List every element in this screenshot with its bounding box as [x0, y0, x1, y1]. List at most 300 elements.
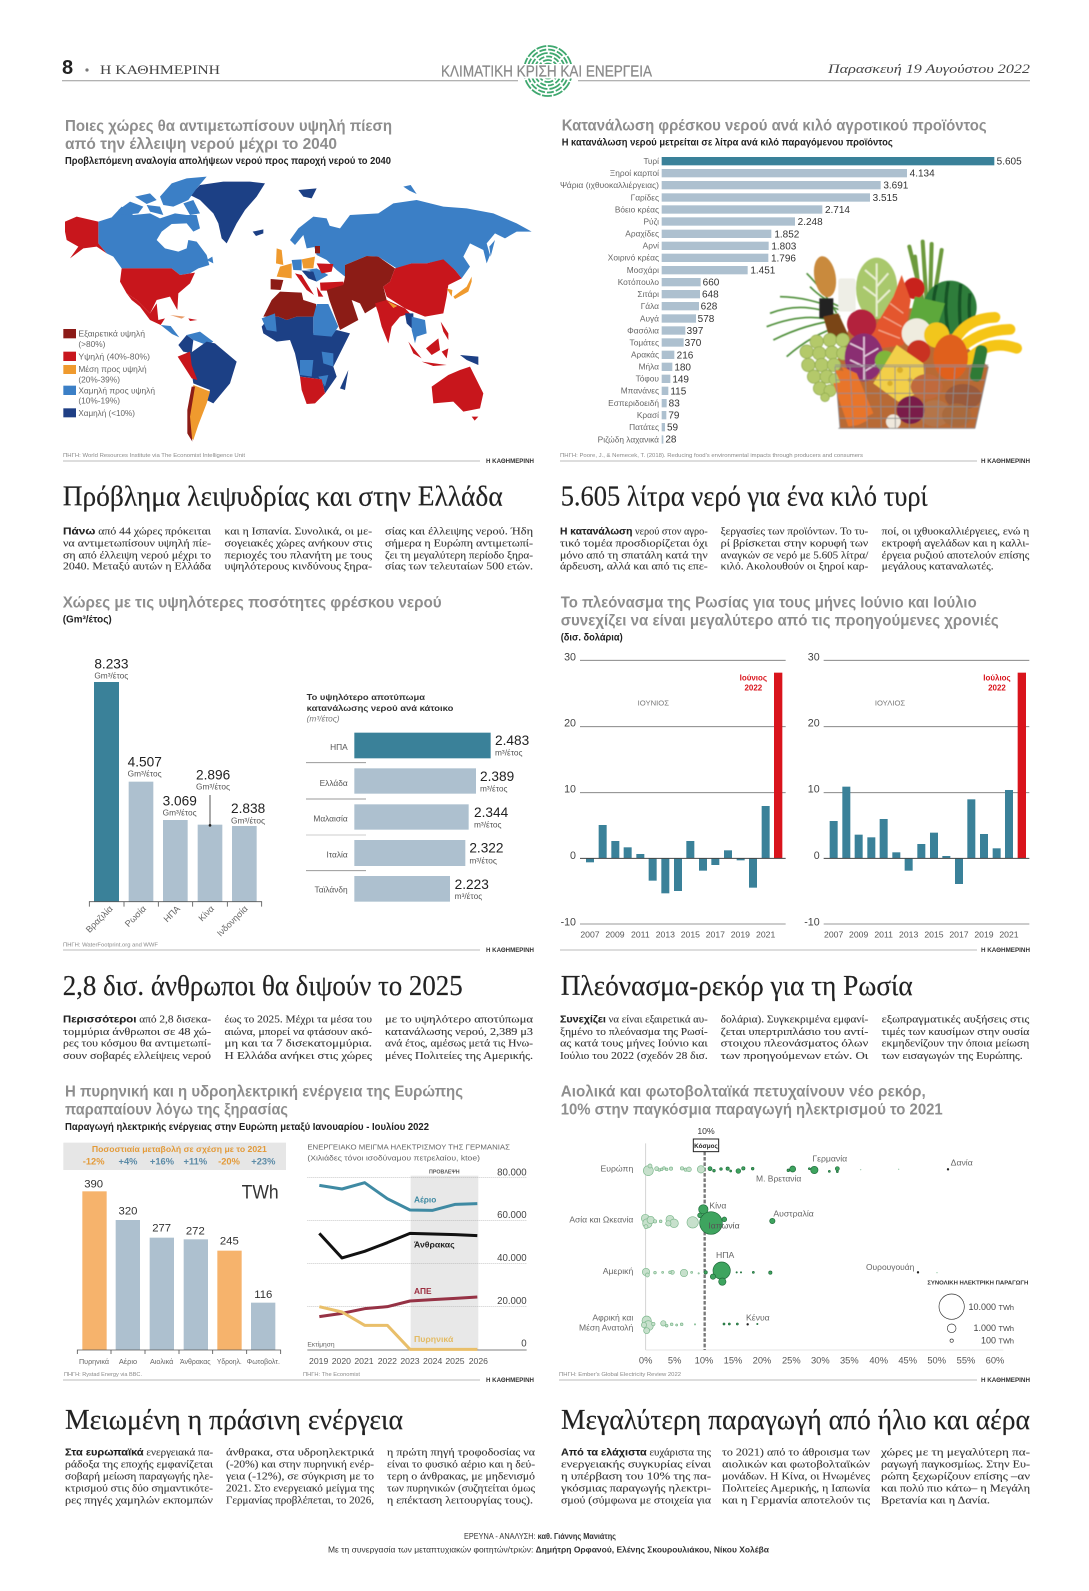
line chart: German electricity mix: Πυρηνικά: [414, 1334, 454, 1344]
heading: 2,8 δισ. άνθρωποι θα διψούν το 2025: [63, 971, 463, 1002]
horizontal bar chart: Τόφου: [636, 374, 659, 384]
bar chart: fresh water by country: Gm³/έτος: [128, 769, 162, 779]
body text: σίας και έλλειψης νερού. Ήδη: [385, 526, 533, 537]
body text: γκόσμιας παραγωγής ηλεκτρι-: [560, 1484, 712, 1495]
panel: wind and solar share bubble chart: [559, 1084, 1031, 1384]
body text: ξημένο το πλεόνασμα της Ρωσί-: [560, 1027, 708, 1038]
horizontal bar chart: Εσπεριδοειδή: [608, 398, 659, 408]
body text: [63, 525, 534, 573]
bubble chart: Αυστραλία: [773, 1209, 814, 1219]
map legend: Χαμηλή προς υψηλή: [78, 385, 155, 395]
body text: τομμύρια άνθρωποι σε 48 χώ-: [63, 1027, 212, 1038]
line chart: German electricity mix: 2021: [354, 1356, 374, 1366]
body text: δολάρια). Συγκεκριμένα εμφανί-: [721, 1015, 869, 1026]
body text: σουν σοβαρές ελλείψεις νερού: [63, 1051, 211, 1062]
body text: έργεια ρυζιού αποτελούν επίσης: [882, 550, 1030, 561]
body text: Περισσότεροι από 2,8 δισεκα-: [63, 1014, 212, 1026]
bar chart: July surplus: 20: [808, 718, 820, 730]
body text: Συνεχίζει να είναι εξαιρετικά αυ-: [560, 1014, 708, 1026]
body text: εκτροφή αγελάδων και η καλλι-: [882, 538, 1030, 549]
bubble chart: ΗΠΑ: [716, 1250, 735, 1260]
body text: τιμές των καυσίμων στην ουσία: [882, 1027, 1030, 1038]
body text: γεια (-12%), σε σύγκριση με το: [225, 1472, 374, 1483]
bar chart: electricity generation in TWh: 116: [254, 1289, 272, 1301]
body text: έως το 2025. Μέχρι τα μέσα του: [224, 1015, 372, 1026]
map title: Ποιες χώρες θα αντιμετωπίσουν υψηλή πίεση: [65, 118, 392, 135]
body text: των προηγούμενων ετών. Οι: [721, 1051, 869, 1062]
percentage change strip: +23%: [251, 1157, 276, 1167]
bar chart: June surplus: 30: [564, 652, 576, 664]
horizontal bar chart: Αυγά: [640, 313, 659, 323]
horizontal bar chart: 370: [685, 338, 702, 349]
bubble chart: 5%: [668, 1355, 681, 1365]
bar chart: July surplus: -10: [804, 916, 820, 928]
bubble chart: 40%: [869, 1355, 888, 1365]
bar chart: water footprint per capita: κατανάλωσης νερού ανά κάτοικο: [307, 703, 453, 713]
bubble chart: Μ. Βρετανία: [756, 1174, 801, 1184]
body text: [63, 1014, 534, 1062]
bar chart: electricity generation in TWh: 272: [186, 1226, 205, 1238]
newspaper name: Η ΚΑΘΗΜΕΡΙΝΗ: [100, 62, 220, 77]
article: 5,605 litres per kilo of cheese: [560, 482, 1030, 573]
bar chart: water footprint per capita: Ιταλία: [327, 849, 348, 859]
body text: μονάδων. Η Κίνα, οι Ηνωμένες: [722, 1472, 871, 1483]
bar chart: July surplus: ΙΟΥΛΙΟΣ: [875, 698, 905, 707]
horizontal bar chart: 180: [674, 362, 691, 373]
bubble chart: 60%: [986, 1355, 1004, 1365]
map source: [63, 453, 535, 465]
body text: (-20%) και στην πυρηνική ενέρ-: [226, 1460, 375, 1471]
bubble chart: Ιαπωνία: [708, 1221, 740, 1231]
chart title: 10% στην παγκόσμια παραγωγή ηλεκτρισμού το 2021: [561, 1101, 943, 1118]
body text: είναι το φυσικό αέριο και η δεύ-: [387, 1460, 536, 1471]
bar chart: July surplus: 2007: [824, 930, 843, 940]
bubble chart: Αφρική και: [592, 1313, 633, 1323]
body text: μεγάλους καταναλωτές.: [882, 562, 994, 573]
horizontal bar chart: 2.714: [825, 205, 850, 216]
world map: [65, 177, 532, 442]
horizontal bar chart: 4.134: [910, 169, 935, 180]
bar chart: water footprint per capita: m³/έτος: [469, 855, 497, 865]
body text: των πυρηνικών (συζητείται όμως: [387, 1484, 536, 1495]
bubble chart: 50%: [927, 1355, 946, 1365]
body text: μη και τα 7 δισεκατομμύρια.: [224, 1039, 372, 1050]
line chart: German electricity mix: (Χιλιάδες τόνοι ισοδύναμου πετρελαίου, ktoe): [307, 1154, 480, 1163]
section title: ΚΛΙΜΑΤΙΚΗ ΚΡΙΣΗ ΚΑΙ ΕΝΕΡΓΕΙΑ: [441, 64, 652, 81]
map legend: Χαμηλή (<10%): [78, 408, 135, 418]
horizontal bar chart: 59: [667, 423, 679, 434]
body text: σογειακές χώρες ανήκουν στις: [224, 538, 373, 549]
bar chart: fresh water by country: Κίνα: [197, 904, 216, 923]
body text: η πρώτη πηγή τροφοδοσίας να: [387, 1448, 536, 1459]
bubble chart: Ασία και Ωκεανία: [569, 1215, 633, 1225]
bar chart: water footprint per capita: 2.223: [455, 877, 489, 892]
bubble chart: 15%: [724, 1355, 742, 1365]
horizontal bar chart: Ρύζι: [644, 216, 659, 226]
map legend: (20%-39%): [78, 374, 120, 384]
percentage change strip: +16%: [150, 1157, 175, 1167]
body text: ράδοξα της εποχής εμφανίζεται: [65, 1460, 213, 1471]
body text: κτρισμού στις δύο σημαντικότε-: [65, 1484, 214, 1495]
line chart: German electricity mix: 60.000: [497, 1210, 527, 1221]
map legend: (>80%): [78, 339, 106, 349]
bar chart: July surplus: 2015: [924, 930, 944, 940]
horizontal bar chart: 3.691: [883, 181, 909, 192]
bar chart: fresh water by country: Gm³/έτος: [196, 782, 230, 792]
body text: [560, 525, 1030, 573]
body text: χώρες με τη μεγαλύτερη πα-: [880, 1448, 1031, 1459]
chart rule and credit: Η ΚΑΘΗΜΕΡΙΝΗ: [981, 947, 1031, 954]
body text: 2040. Μεταξύ αυτών η Ελλάδα: [63, 562, 212, 573]
bubbles: light group below world share: [641, 1164, 705, 1334]
line chart: German electricity mix: ΕΝΕΡΓΕΙΑΚΟ ΜΕΙΓΜΑ ΗΛΕΚΤΡΙΣΜΟΥ ΤΗΣ ΓΕΡΜΑΝΙΑΣ: [307, 1142, 510, 1151]
body text: σοβαρή μείωση παραγωγής ηλε-: [65, 1472, 214, 1483]
chart source: Η ΚΑΘΗΜΕΡΙΝΗ: [981, 1377, 1031, 1384]
horizontal bar chart: Φασόλια: [627, 325, 659, 335]
bubble chart: Γερμανία: [812, 1154, 847, 1164]
chart sources: ΠΗΓΗ: The Economist: [303, 1372, 360, 1378]
body text: Γερμανίας προβλέπεται, το 2026,: [226, 1495, 374, 1506]
map title: [65, 118, 392, 153]
body text: [65, 1447, 536, 1506]
body text: Ιούλιο του 2022 (σχεδόν 28 δισ.: [560, 1051, 708, 1062]
body text: αναγκών σε νερό με 5.605 λίτρα/: [721, 550, 868, 561]
body text: ξεργασίες των προϊόντων. Το τυ-: [721, 526, 869, 537]
body text: ποί, οι ιχθυοκαλλιέργειες, ενώ η: [882, 526, 1029, 537]
heading: Πρόβλημα λειψυδρίας και στην Ελλάδα: [63, 482, 503, 513]
bar chart: water footprint per capita: [306, 692, 529, 902]
bar chart: electricity generation in TWh: Αέριο: [119, 1357, 137, 1366]
horizontal bar chart: Αραχίδες: [625, 229, 659, 239]
body text: ας κατά τους μήνες Ιούνιο και: [560, 1039, 708, 1050]
horizontal bar chart: Βόειο κρέας: [615, 204, 659, 214]
horizontal bar chart: 216: [677, 350, 694, 361]
body text: με το υψηλότερο αποτύπωμα: [385, 1015, 534, 1026]
bar chart: electricity generation in TWh: Αιολικά: [150, 1357, 174, 1366]
chart source: [63, 943, 535, 954]
article: reduced green energy: [65, 1405, 536, 1506]
chart subtitle: Παραγωγή ηλεκτρικής ενέργειας στην Ευρώπη μεταξύ Ιανουαρίου - Ιουλίου 2022: [65, 1122, 429, 1133]
panel: European nuclear and hydro energy: [63, 1084, 535, 1384]
body text: και πολύ πιο κάτω– η Μεγάλη: [881, 1484, 1030, 1495]
map legend: Μέση προς υψηλή: [78, 364, 147, 374]
bubble chart: Μέση Ανατολή: [579, 1323, 634, 1333]
bubble size legend: [927, 1281, 1028, 1345]
body text: περιοχές του πλανήτη με τους: [224, 550, 373, 561]
article: 2.8 billion people: [63, 971, 534, 1062]
bar chart: July surplus: [804, 652, 1029, 940]
chart title: Η πυρηνική και η υδροηλεκτρική ενέργεια της Ευρώπης: [65, 1084, 463, 1101]
chart title: Χώρες με τις υψηλότερες ποσότητες φρέσκου νερού: [63, 594, 442, 611]
line chart: German electricity mix: 2024: [423, 1356, 442, 1366]
bar chart: fresh water by country: Ρωσία: [123, 904, 148, 929]
horizontal bar chart: 79: [668, 411, 680, 422]
body text: στοιχου πλεονάσματος όλων: [721, 1039, 869, 1050]
horizontal bar chart: Αρνί: [643, 241, 659, 251]
bar chart: June surplus: ΙΟΥΝΙΟΣ: [638, 698, 669, 707]
bar chart: water footprint per capita: m³/έτος: [474, 820, 502, 830]
bar chart: fresh water by country: Gm³/έτος: [163, 808, 197, 818]
bar chart: fresh water by country: 8.233: [94, 656, 129, 671]
line chart: German electricity mix: 2025: [445, 1356, 465, 1366]
bubble chart: 20%: [753, 1355, 771, 1365]
bubble chart: Δανία: [951, 1157, 973, 1167]
body text: η επέκταση λειτουργίας τους).: [387, 1495, 533, 1506]
horizontal bar chart: 1.852: [774, 229, 800, 240]
bubble size legend: 100 TWh: [981, 1335, 1014, 1345]
horizontal bar chart: Μήλα: [639, 362, 659, 372]
chart title: [561, 1084, 943, 1118]
chart title: Το πλεόνασμα της Ρωσίας για τους μήνες Ιούνιο και Ιούλιο: [561, 594, 977, 611]
body text: άνθρακα, στα υδροηλεκτρικά: [226, 1448, 375, 1459]
bar chart: fresh water by country: 4.507: [128, 754, 162, 769]
bar chart: July surplus: 2013: [899, 930, 918, 940]
bubble chart: 25%: [782, 1355, 801, 1365]
map source: ΠΗΓΗ: World Resources Institute via The Economist Intelligence Unit: [63, 453, 246, 459]
bubble chart: [569, 1126, 1028, 1365]
body text: μόνο από τη σπατάλη κατά την: [560, 550, 708, 561]
percentage change strip: -20%: [218, 1157, 241, 1167]
bar chart: water footprint per capita: 2.483: [495, 733, 529, 748]
bar chart: July surplus: 2022: [988, 684, 1006, 693]
bar chart: July surplus: 2019: [974, 930, 994, 940]
body text: άρδευση, αλλά και από τις επε-: [560, 562, 708, 573]
horizontal bar chart: 149: [672, 374, 689, 385]
bar chart: electricity generation in TWh: Υδροηλ.: [217, 1357, 242, 1366]
line chart: German electricity mix: [307, 1142, 527, 1366]
bar chart: fresh water by country: [84, 656, 265, 938]
map subtitle: Προβλεπόμενη αναλογία απολήψεων νερού προς παροχή νερού το 2040: [65, 156, 391, 167]
chart title: [561, 594, 999, 630]
horizontal bar chart: 660: [703, 278, 720, 289]
bar chart: June surplus: 2009: [605, 930, 625, 940]
chart source: Η ΚΑΘΗΜΕΡΙΝΗ: [981, 458, 1031, 465]
bubble chart: Αμερική: [603, 1266, 634, 1276]
body text: το 2021) από το άθροισμα των: [722, 1448, 870, 1459]
line chart: German electricity mix: Εκτίμηση: [307, 1341, 335, 1349]
bar chart: water footprint per capita: 2.344: [474, 805, 509, 820]
horizontal bar chart: 628: [701, 302, 718, 313]
bar chart: electricity generation in TWh: Άνθρακας: [180, 1357, 211, 1366]
body text: των εισαγωγών της Ευρώπης.: [882, 1051, 1023, 1062]
horizontal bar chart: Τομάτες: [630, 337, 659, 347]
body text: και η Γερμανία αποτελούν τις: [722, 1495, 871, 1506]
heading: 5.605 λίτρα νερό για ένα κιλό τυρί: [561, 482, 928, 513]
horizontal bar chart: 28: [665, 435, 677, 446]
bubble chart: Κένυα: [746, 1313, 770, 1323]
bar chart: July surplus: 2021: [999, 930, 1019, 940]
bar chart: July surplus: 0: [814, 850, 820, 862]
horizontal bar chart: Γάλα: [641, 301, 659, 311]
body text: η υπέρβαση του 10% της πα-: [561, 1472, 712, 1483]
horizontal bar chart: Πατάτες: [629, 422, 659, 432]
body text: τερη ο άνθρακας, με μηδενισμό: [387, 1472, 535, 1483]
bar chart: June surplus: 2015: [681, 930, 700, 940]
bar chart: water footprint per capita: m³/έτος: [455, 891, 482, 901]
bar chart: June surplus: 0: [570, 850, 576, 862]
chart unit: (δισ. δολάρια): [561, 633, 623, 644]
horizontal bar chart: 115: [670, 386, 687, 397]
horizontal bar chart: 83: [669, 399, 680, 410]
body text: Πολιτείες Αμερικής, η Ιαπωνία: [722, 1484, 871, 1495]
line chart: German electricity mix: ΠΡΟΒΛΕΨΗ: [429, 1169, 460, 1175]
bar chart: water footprint per capita: Ελλάδα: [320, 778, 348, 788]
horizontal bar chart: Μπανάνες: [621, 386, 659, 396]
bar chart: June surplus: 2021: [756, 930, 775, 940]
bar chart: June surplus: -10: [561, 916, 576, 928]
bar chart: June surplus: Ιούνιος: [740, 674, 767, 683]
body text: Στα ευρωπαϊκά ενεργειακά πα-: [65, 1447, 214, 1459]
bar chart: June surplus: 2007: [580, 930, 600, 940]
bar chart: June surplus: 2017: [706, 930, 725, 940]
bar chart: fresh water by country: Ινδονησία: [215, 904, 250, 938]
bubble chart: Ευρώπη: [600, 1164, 634, 1174]
bar chart: June surplus: 10: [564, 784, 576, 796]
body text: τικό τομέα προσδιορίζεται όχι: [560, 538, 708, 549]
body text: ζει τη μεγαλύτερη περίοδο ξηρα-: [385, 550, 534, 561]
bar chart: July surplus: 2011: [874, 930, 893, 940]
bar chart: electricity generation in TWh: [63, 1143, 286, 1366]
body text: ανά έτος, αμέσως μετά τις Ηνω-: [385, 1039, 534, 1050]
bar chart: June surplus: 20: [564, 718, 576, 730]
body text: Βρετανία και η Δανία.: [881, 1495, 990, 1506]
bubble chart: 0%: [639, 1355, 652, 1365]
body text: αιώνα, μπορεί να φτάσουν ακό-: [224, 1027, 373, 1038]
line chart: German electricity mix: 0: [521, 1339, 527, 1350]
bubble chart: 30%: [811, 1355, 830, 1365]
bubble chart: 10%: [695, 1355, 713, 1365]
line chart: German electricity mix: 2023: [400, 1356, 420, 1366]
map title: από την έλλειψη νερού μέχρι το 2040: [65, 136, 337, 153]
horizontal bar chart: Μοσχάρι: [627, 265, 659, 275]
body text: ενεργειακής συγκυρίας είναι: [561, 1460, 711, 1471]
body text: κιλό. Ακολουθούν οι ξηροί καρ-: [721, 562, 869, 573]
map legend: Εξαιρετικά υψηλή: [78, 329, 145, 339]
horizontal bar chart: Ξηροί καρποί: [610, 168, 659, 178]
chart source: ΠΗΓΗ: Poore, J., & Nemecek, T. (2018). Reducing food's environmental impacts through producers and consumers: [560, 453, 863, 459]
chart title: [65, 1084, 463, 1118]
heading: Μειωμένη η πράσινη ενέργεια: [65, 1405, 403, 1436]
date: Παρασκευή 19 Αυγούστου 2022: [827, 61, 1031, 76]
bubble chart: 35%: [840, 1355, 859, 1365]
panel: water stress world map: [63, 118, 535, 465]
world marker: 10%: [697, 1126, 715, 1136]
chart source: [560, 453, 1031, 465]
horizontal bar chart: 648: [702, 290, 719, 301]
body text: να αντιμετωπίσουν υψηλή πίε-: [63, 538, 212, 549]
bar chart: water footprint per capita: 2.389: [480, 769, 514, 784]
bubble size legend: ΣΥΝΟΛΙΚΗ ΗΛΕΚΤΡΙΚΗ ΠΑΡΑΓΩΓΗ: [927, 1281, 1028, 1287]
panel: Russia trade surplus: [560, 594, 1031, 954]
body text: Η κατανάλωση νερού στον αγρο-: [560, 525, 708, 537]
article: water shortage in Greece: [63, 482, 534, 573]
horizontal bar chart: Ψάρια (ιχθυοκαλλιέργειας): [560, 180, 659, 190]
bar chart: water footprint per capita: m³/έτος: [495, 748, 523, 758]
icon: green fingerprint: [524, 46, 572, 96]
body text: σμού (σύμφωνα με στοιχεία για: [561, 1495, 712, 1506]
bar chart: fresh water by country: 2.896: [196, 768, 230, 783]
body text: [560, 1014, 1030, 1062]
bar chart: water footprint per capita: Ταϊλάνδη: [315, 885, 348, 895]
bubble size legend: 10.000 TWh: [969, 1302, 1014, 1312]
horizontal bar chart: [560, 156, 1022, 446]
map legend: [63, 329, 155, 418]
body text: ρες πηγές χαμηλών εκπομπών: [65, 1495, 213, 1506]
line chart: German electricity mix: 20.000: [497, 1296, 527, 1307]
chart sources: Η ΚΑΘΗΜΕΡΙΝΗ: [486, 1377, 535, 1384]
body text: ρί βρίσκεται στην κορυφή των: [721, 538, 869, 549]
horizontal bar chart: Κοτόπουλο: [618, 277, 659, 287]
bar chart: fresh water by country: Βραζιλία: [84, 904, 115, 935]
chart unit: (Gm³/έτος): [63, 615, 112, 626]
body text: ζεται υπερτριπλάσιο του αντί-: [721, 1027, 869, 1038]
bar chart: July surplus: Ιούλιος: [983, 674, 1011, 683]
bubble chart: Κίνα: [709, 1201, 726, 1211]
bar chart: electricity generation in TWh: Φωτοβολτ.: [247, 1357, 280, 1366]
bar chart: fresh water by country: ΗΠΑ: [162, 904, 182, 924]
bar chart: July surplus: 2017: [949, 930, 969, 940]
bar chart: June surplus: 2019: [731, 930, 750, 940]
body text: και η Ισπανία. Συνολικά, οι με-: [224, 526, 373, 537]
chart subtitle: Η κατανάλωση νερού μετρείται σε λίτρα ανά κιλό παραγόμενου προϊόντος: [562, 138, 893, 149]
world marker: Κόσμος: [694, 1143, 719, 1150]
article: more production from sun and wind: [560, 1405, 1031, 1506]
body text: Πάνω από 44 χώρες πρόκειται: [63, 525, 211, 537]
bar chart: July surplus: 2009: [849, 930, 868, 940]
horizontal bar chart: 2.248: [798, 217, 823, 228]
body text: 2021. Στο ενεργειακό μείγμα της: [226, 1484, 375, 1495]
bar chart: electricity generation in TWh: 320: [119, 1206, 137, 1218]
chart title: Κατανάλωση φρέσκου νερού ανά κιλό αγροτικού προϊόντος: [562, 118, 987, 135]
horizontal bar chart: 3.515: [873, 193, 898, 204]
bar chart: July surplus: 30: [808, 652, 820, 664]
bar chart: electricity generation in TWh: 390: [84, 1178, 103, 1190]
horizontal bar chart: 578: [698, 314, 715, 325]
body text: [560, 1447, 1031, 1506]
body text: κατανάλωσης νερού, 2,389 μ3: [385, 1027, 533, 1038]
page header: [62, 46, 1031, 96]
horizontal bar chart: 1.803: [771, 241, 797, 252]
credits: ΕΡΕΥΝΑ - ΑΝΑΛΥΣΗ: καθ. Γιάννης Μανιάτης: [464, 1531, 616, 1541]
bar chart: electricity generation in TWh: 277: [152, 1223, 171, 1235]
horizontal bar chart: Τυρί: [643, 156, 659, 166]
bubble chart: Ουρουγουάη: [866, 1262, 915, 1272]
chart source: [559, 1372, 1031, 1384]
line chart: German electricity mix: 2022: [378, 1356, 397, 1366]
body text: αιολικών και φωτοβολταϊκών: [722, 1460, 870, 1471]
bar chart: June surplus: [561, 652, 786, 940]
bar chart: electricity generation in TWh: TWh: [242, 1182, 279, 1203]
map legend: Υψηλή (40%-80%): [78, 351, 150, 361]
chart title: συνεχίζει να είναι μεγαλύτερο από τις προηγούμενες χρονιές: [561, 613, 999, 630]
heading: Μεγαλύτερη παραγωγή από ήλιο και αέρα: [561, 1405, 1030, 1436]
world marker: [693, 1126, 719, 1152]
bar chart: July surplus: 10: [808, 784, 820, 796]
body text: Από τα ελάχιστα ευχάριστα της: [561, 1447, 712, 1459]
line chart: German electricity mix: Αέριο: [414, 1195, 436, 1205]
panel: fresh water per kilo bar chart: [560, 118, 1031, 465]
body text: ση από έλλειψη νερού μέχρι το: [63, 550, 211, 561]
chart source: ΠΗΓΗ: Ember's Global Electricity Review 2022: [559, 1372, 681, 1378]
percentage change strip: Ποσοστιαία μεταβολή σε σχέση με το 2021: [92, 1145, 267, 1154]
percentage change strip: [63, 1143, 286, 1170]
bubbles: dark group above world share: [698, 1166, 899, 1325]
body text: υψηλότερους κινδύνους ξηρα-: [224, 562, 373, 573]
horizontal bar chart: Ριζώδη λαχανικά: [598, 434, 659, 444]
body text: εκμηδενίζουν την όποια μείωση: [882, 1039, 1029, 1050]
page number: 8: [62, 57, 73, 79]
line chart: German electricity mix: 40.000: [497, 1253, 527, 1264]
